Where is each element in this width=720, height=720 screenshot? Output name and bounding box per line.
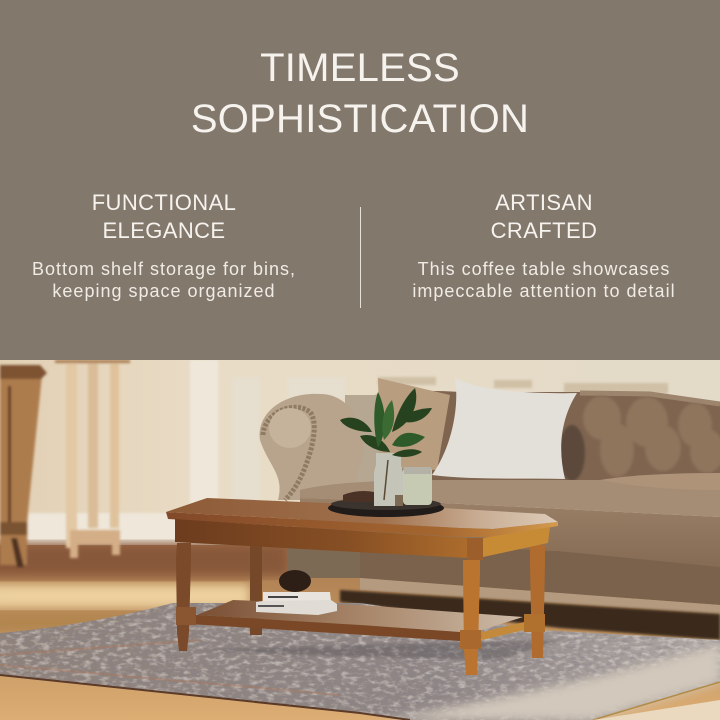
apron <box>175 519 467 558</box>
rug <box>0 603 720 720</box>
pale floor strip <box>360 578 720 614</box>
title <box>191 46 529 141</box>
heading: functional elegance <box>92 190 236 243</box>
text: functional elegance description <box>32 259 296 301</box>
heading: artisan crafted <box>491 190 597 243</box>
side cabinet <box>0 365 47 567</box>
coffee table <box>166 498 558 675</box>
white pillow <box>432 378 577 479</box>
heading: functional elegance: FUNCTIONAL <box>92 190 236 215</box>
heading: artisan crafted: CRAFTED <box>491 218 597 243</box>
sofa arm <box>260 394 364 500</box>
rosette block <box>467 538 483 560</box>
side table <box>55 360 130 558</box>
sofa foot <box>279 570 311 592</box>
photo: living room scene with coffee table <box>0 360 720 720</box>
text: artisan crafted description <box>412 259 676 301</box>
floor shadow <box>340 590 720 640</box>
lower shelf <box>190 600 537 641</box>
title: TIMELESS <box>260 46 460 90</box>
right leg joint <box>524 614 545 632</box>
back legs <box>250 540 262 635</box>
candle jar <box>403 467 432 505</box>
top edge <box>166 512 558 537</box>
table top <box>166 498 558 529</box>
text: functional elegance description: Bottom shelf storage for bins, <box>32 259 296 279</box>
text: functional elegance description: keeping space organized <box>52 281 276 301</box>
heading: artisan crafted: ARTISAN <box>495 190 593 215</box>
text: artisan crafted description: This coffee table showcases <box>418 259 670 279</box>
sofa back <box>360 391 720 490</box>
sofa seat front <box>300 498 720 567</box>
column divider <box>360 207 361 308</box>
panel: text header <box>0 0 720 360</box>
text: artisan crafted description: impeccable attention to detail <box>412 281 676 301</box>
tufted cushions <box>559 396 720 481</box>
floor <box>0 543 720 720</box>
wall background <box>0 360 720 550</box>
vase with plant <box>340 388 432 506</box>
wall panelling <box>28 360 668 550</box>
sofa base <box>287 540 720 605</box>
books <box>256 592 337 615</box>
tray <box>328 491 444 517</box>
tan pillow <box>378 378 450 470</box>
heading: functional elegance: ELEGANCE <box>102 218 226 243</box>
title: SOPHISTICATION <box>191 97 529 141</box>
sofa <box>260 391 720 605</box>
front right leg <box>463 560 480 675</box>
sofa seat top <box>300 480 720 517</box>
front left leg <box>176 543 191 651</box>
right cushion <box>600 473 720 490</box>
